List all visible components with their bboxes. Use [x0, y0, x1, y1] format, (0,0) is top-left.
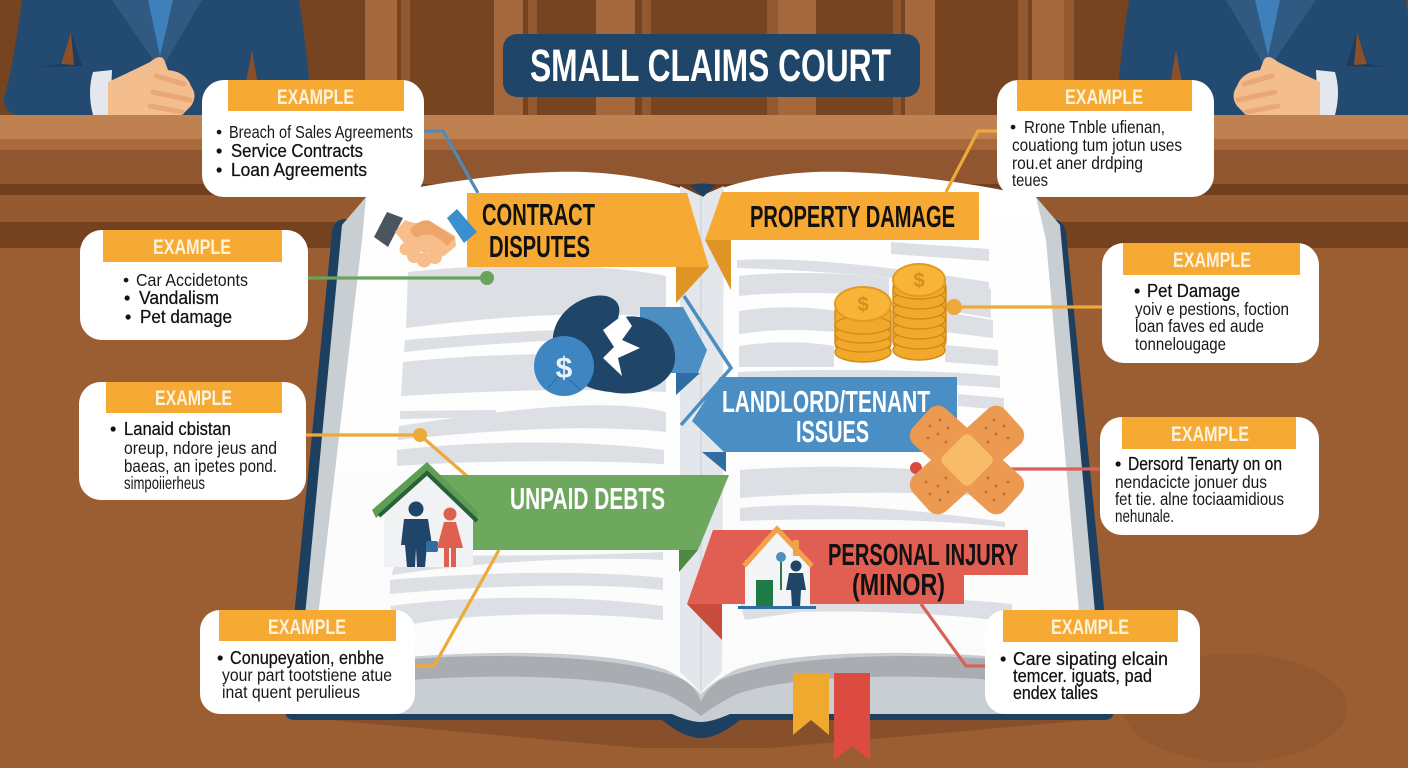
card header [1017, 80, 1192, 111]
banner: contract disputes: CONTRACT [482, 197, 595, 232]
right page text bars [737, 242, 1012, 622]
card header [106, 382, 282, 413]
title banner: SMALL CLAIMS COURT [530, 40, 891, 91]
card: lower left example: • [217, 648, 223, 668]
banner: contract disputes [467, 193, 709, 303]
banner: landlord/tenant issues: ISSUES [796, 414, 869, 449]
card header [219, 610, 396, 641]
card: contract example: Breach of Sales Agreements [229, 122, 413, 142]
icon: blue arrow ribbon [640, 296, 731, 425]
card: unpaid debts example: oreup, ndore jeus and [124, 438, 277, 458]
card: lower left example: Conupeyation, enbhe [230, 648, 384, 668]
card: pet damage example: yoiv e pestions, foction [1135, 299, 1289, 319]
card: unpaid debts example: simpoiierheus [124, 473, 205, 493]
card: car accidents example: Pet damage [140, 307, 232, 327]
figure: right attorney [1116, 0, 1408, 115]
judge bench [0, 115, 1408, 248]
icon: gold coin stacks [835, 264, 946, 362]
card: landlord tenant example: Dersord Tenarty on on [1128, 454, 1282, 474]
icon: house with family [372, 462, 478, 567]
left page text bars [390, 266, 666, 624]
figure: left attorney [4, 0, 312, 115]
banner: personal injury: PERSONAL INJURY [828, 537, 1018, 572]
card: unpaid debts example: • [110, 419, 116, 439]
page edges [298, 197, 1106, 722]
card header [1122, 417, 1296, 449]
icon: house with person [738, 529, 816, 609]
card: car accidents example: EXAMPLE [153, 236, 231, 259]
banner: personal injury: (MINOR) [852, 567, 945, 602]
banner: unpaid debts: UNPAID DEBTS [510, 481, 665, 516]
card: pet damage example: • [1134, 281, 1140, 301]
card: car accidents example: Car Accidetonts [136, 270, 248, 290]
card: car accidents example: • [123, 270, 129, 290]
card: personal injury example: temcer. iguats, pad [1013, 666, 1152, 686]
card: unpaid debts example [79, 382, 306, 500]
card: pet damage example: loan faves ed aude [1135, 316, 1264, 336]
pages [312, 172, 1084, 694]
card: contract example: • [216, 141, 222, 161]
icon: broken coin: $ [556, 352, 573, 385]
gutter [680, 186, 724, 692]
floor shadows [330, 654, 1347, 762]
banner: landlord/tenant issues: LANDLORD/TENANT [722, 384, 930, 419]
card: car accidents example [80, 230, 308, 340]
card: landlord tenant example: nehunale. [1115, 506, 1174, 526]
card: landlord tenant example [1100, 417, 1319, 535]
card: car accidents example: • [125, 307, 131, 327]
card: personal injury example: • [1000, 649, 1006, 669]
banner: property damage: PROPERTY DAMAGE [750, 199, 955, 234]
icon: broken coin [534, 295, 675, 396]
card header [103, 230, 282, 262]
card: top right example: • [1010, 117, 1016, 137]
banner: unpaid debts [440, 475, 729, 572]
card: top right example [997, 80, 1214, 197]
icon: gold coin stacks: $ [913, 270, 925, 292]
card: personal injury example: EXAMPLE [1051, 616, 1129, 639]
card: lower left example [200, 610, 415, 714]
banner: landlord/tenant issues [692, 377, 957, 472]
card: top right example: rou.et aner drdping [1012, 153, 1143, 173]
card: lower left example: EXAMPLE [268, 616, 346, 639]
card: personal injury example: endex talies [1013, 683, 1098, 703]
card: lower left example: your part tootstiene atue [222, 665, 392, 685]
card: contract example [202, 80, 424, 197]
card: pet damage example: EXAMPLE [1173, 249, 1251, 272]
icon: gold coin stacks: $ [857, 294, 869, 316]
card: car accidents example: • [124, 288, 130, 308]
card: contract example: Service Contracts [231, 141, 363, 161]
card: personal injury example: Care sipating elcain [1013, 649, 1168, 669]
connector lines [300, 131, 1110, 666]
card: unpaid debts example: EXAMPLE [155, 387, 232, 410]
title banner [503, 34, 920, 97]
card header [1003, 610, 1178, 642]
card: car accidents example: Vandalism [139, 288, 219, 308]
card: unpaid debts example: Lanaid cbistan [124, 419, 231, 439]
card header [228, 80, 404, 111]
card: top right example: Rrone Tnble ufienan, [1024, 117, 1165, 137]
card: pet damage example: tonnelougage [1135, 334, 1226, 354]
banner: property damage [705, 192, 979, 290]
card: top right example: couationg tum jotun uses [1012, 135, 1182, 155]
card: landlord tenant example: EXAMPLE [1171, 423, 1249, 446]
card: landlord tenant example: nendacicte jonuer dus [1115, 472, 1267, 492]
card: unpaid debts example: baeas, an ipetes pond. [124, 456, 277, 476]
card header [1123, 243, 1300, 275]
card: top right example: teues [1012, 170, 1048, 190]
card: lower left example: inat quent perulieus [222, 682, 360, 702]
card: personal injury example [985, 610, 1200, 714]
bookmarks [793, 673, 870, 760]
card: contract example: Loan Agreements [231, 160, 367, 180]
card: pet damage example: Pet Damage [1147, 281, 1240, 301]
book cover [285, 219, 1114, 738]
card: landlord tenant example: fet tie. alne tociaamidious [1115, 489, 1284, 509]
card: pet damage example [1102, 243, 1319, 363]
card: top right example: EXAMPLE [1065, 86, 1143, 109]
card: contract example: EXAMPLE [277, 86, 354, 109]
card: landlord tenant example: • [1115, 454, 1121, 474]
icon: handshake [374, 209, 477, 268]
icon: bandage [905, 401, 1029, 519]
banner: personal injury [687, 530, 1028, 640]
open law book [285, 172, 1114, 738]
card: contract example: • [216, 122, 222, 142]
banner: contract disputes: DISPUTES [489, 229, 590, 264]
card: contract example: • [216, 160, 222, 180]
